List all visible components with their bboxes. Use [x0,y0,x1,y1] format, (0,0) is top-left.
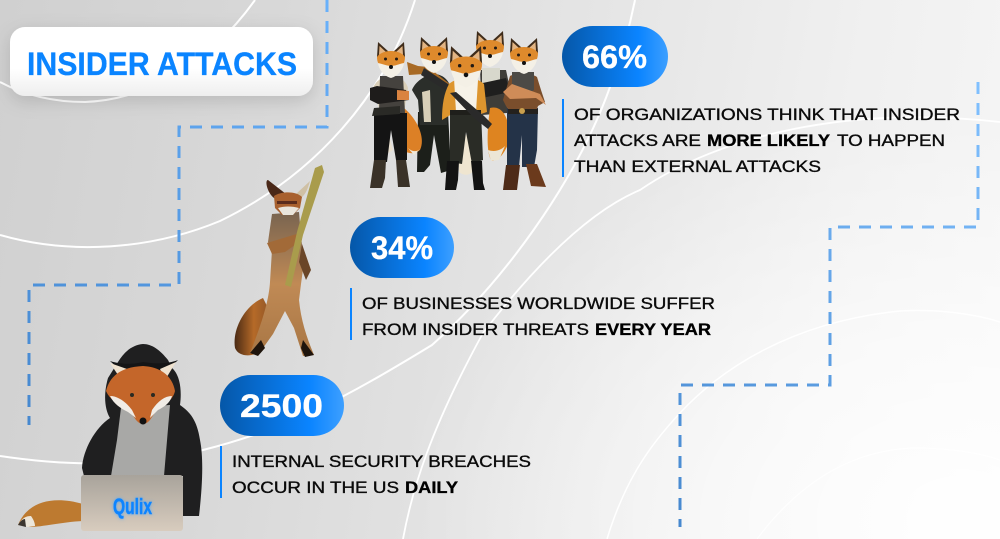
stat: 34%: EVERY YEAR [595,320,711,339]
face [106,366,175,424]
stat: 2500: DAILY [405,478,459,497]
stat: 66%: OF ORGANIZATIONS THINK THAT INSIDER [574,105,960,124]
dashed stepped path right [680,82,978,527]
stat: 2500 [220,375,531,498]
tail [235,298,273,355]
grey sweater [111,405,170,476]
bat [285,165,324,287]
stat: 34%: OF BUSINESSES WORLDWIDE SUFFER [362,294,715,313]
Qulix logo text: Qulix [113,494,153,519]
head [266,180,286,199]
stat: 34%: 34% [371,230,433,266]
title [10,27,313,96]
laptop [81,475,183,531]
stat: 66%: 66% [582,39,647,75]
tail [18,500,83,527]
stat: 2500: OCCUR IN THE US [232,478,399,497]
torso and legs [250,212,314,356]
stat: 66%: THAN EXTERNAL ATTACKS [574,157,821,176]
fox front holding gun [442,46,492,190]
ears [110,363,127,381]
stat: 34% [350,217,715,340]
hoodie [82,344,202,516]
stat: 66%: MORE LIKELY [707,131,831,150]
illustration: group of armed foxes [370,31,546,190]
title: INSIDER ATTACKS [27,46,297,82]
dashed stepped path left [29,0,327,425]
arm [267,233,302,254]
stat: 66%: ATTACKS ARE [574,131,701,150]
illustration: fox with baseball bat [235,165,324,357]
feet [301,340,314,357]
stat: 34%: FROM INSIDER THREATS [362,320,589,339]
fox back right with orange tail [476,31,510,161]
illustration: hooded fox with laptop [18,344,202,531]
fox back left with rifle [407,37,451,173]
fox left in vest with tail [370,42,422,188]
stat: 66% [562,26,960,177]
stat: 66%: TO HAPPEN [837,131,945,150]
fox right in jeans [503,38,546,190]
stat: 2500: 2500 [240,388,323,424]
stat: 2500: INTERNAL SECURITY BREACHES [232,452,531,471]
